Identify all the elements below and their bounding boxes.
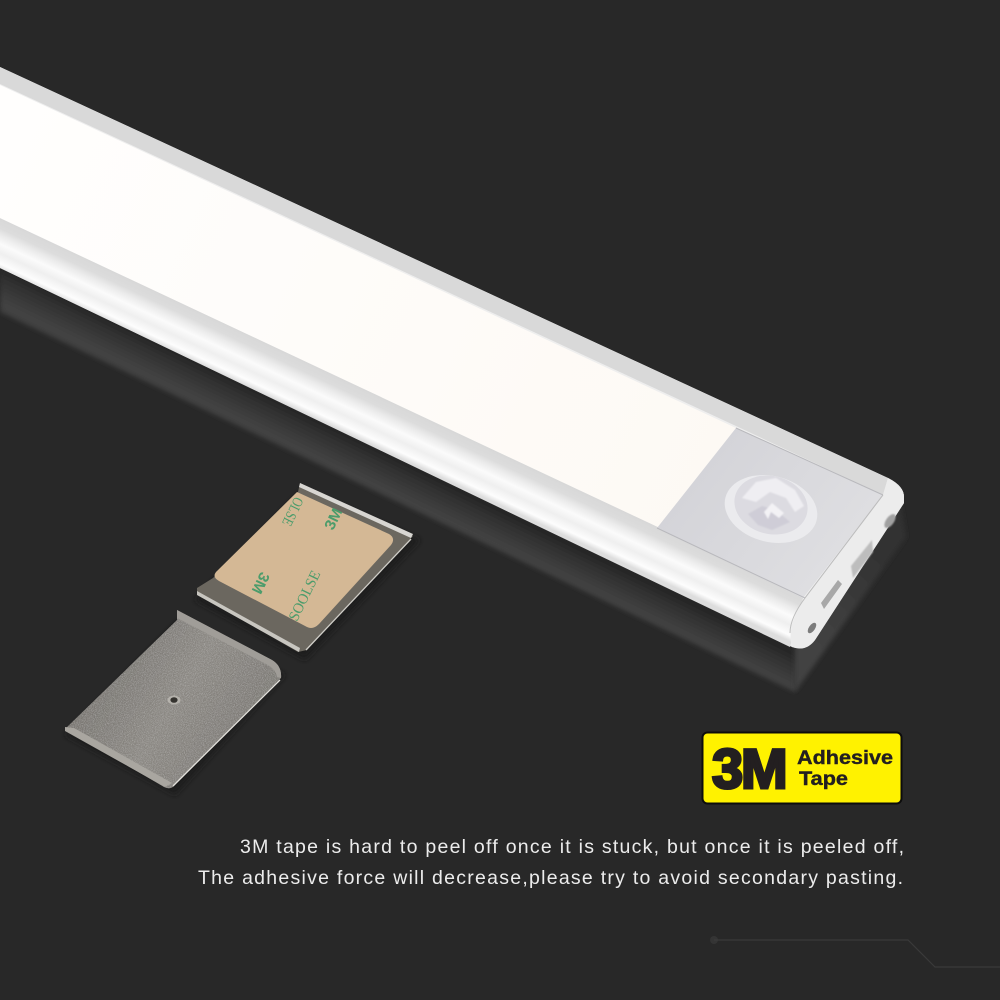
- mounting hole: [168, 696, 180, 704]
- top fold: [177, 610, 281, 678]
- tape print: [248, 494, 346, 624]
- right edge highlight: [173, 680, 280, 786]
- bar body: [0, 67, 904, 648]
- lower rounded edge: [0, 218, 803, 647]
- end cap with ports: [790, 478, 904, 648]
- 3M Adhesive Tape badge: Tape: [799, 768, 848, 790]
- clip shadow: [195, 490, 420, 660]
- tape print: SOOLSE: [286, 568, 324, 624]
- top rim: [0, 67, 888, 495]
- tape print: 3M: [248, 569, 273, 596]
- port: USB-C: [821, 580, 842, 609]
- sensor plate: [657, 428, 883, 598]
- light diffuser panel: [0, 85, 736, 528]
- caption: [198, 836, 904, 889]
- decorative circuit line: [710, 936, 1000, 967]
- bottom fold highlight: [197, 591, 300, 652]
- mounting clip with 3M tape: [195, 483, 420, 660]
- clip shadow: [65, 620, 285, 795]
- port: round hole bottom: [806, 621, 818, 635]
- top fold highlight: [299, 483, 413, 538]
- tape print: OLSE: [278, 494, 306, 528]
- 3M Adhesive Tape badge: [702, 732, 902, 804]
- caption: The adhesive force will decrease,please try to avoid secondary pasting.: [198, 867, 903, 889]
- 3M logo: 3: [712, 737, 743, 800]
- LED light bar: [0, 67, 904, 648]
- 3M logo: M: [741, 737, 788, 800]
- port: round hole top: [882, 512, 898, 530]
- clip plate: [65, 610, 281, 788]
- motion sensor: [717, 466, 825, 552]
- port: switch: [851, 540, 873, 578]
- caption: 3M tape is hard to peel off once it is stuck, but once it is peeled off,: [240, 836, 904, 858]
- tape print: 3M: [321, 506, 346, 533]
- badge label: Adhesive: [797, 747, 893, 769]
- tape: [215, 492, 393, 628]
- clip steel: [197, 483, 413, 652]
- bare mounting clip: [65, 610, 285, 795]
- right edge highlight: [306, 539, 411, 650]
- bottom fold: [65, 727, 172, 787]
- reflection of the bar on the surface: [0, 262, 906, 692]
